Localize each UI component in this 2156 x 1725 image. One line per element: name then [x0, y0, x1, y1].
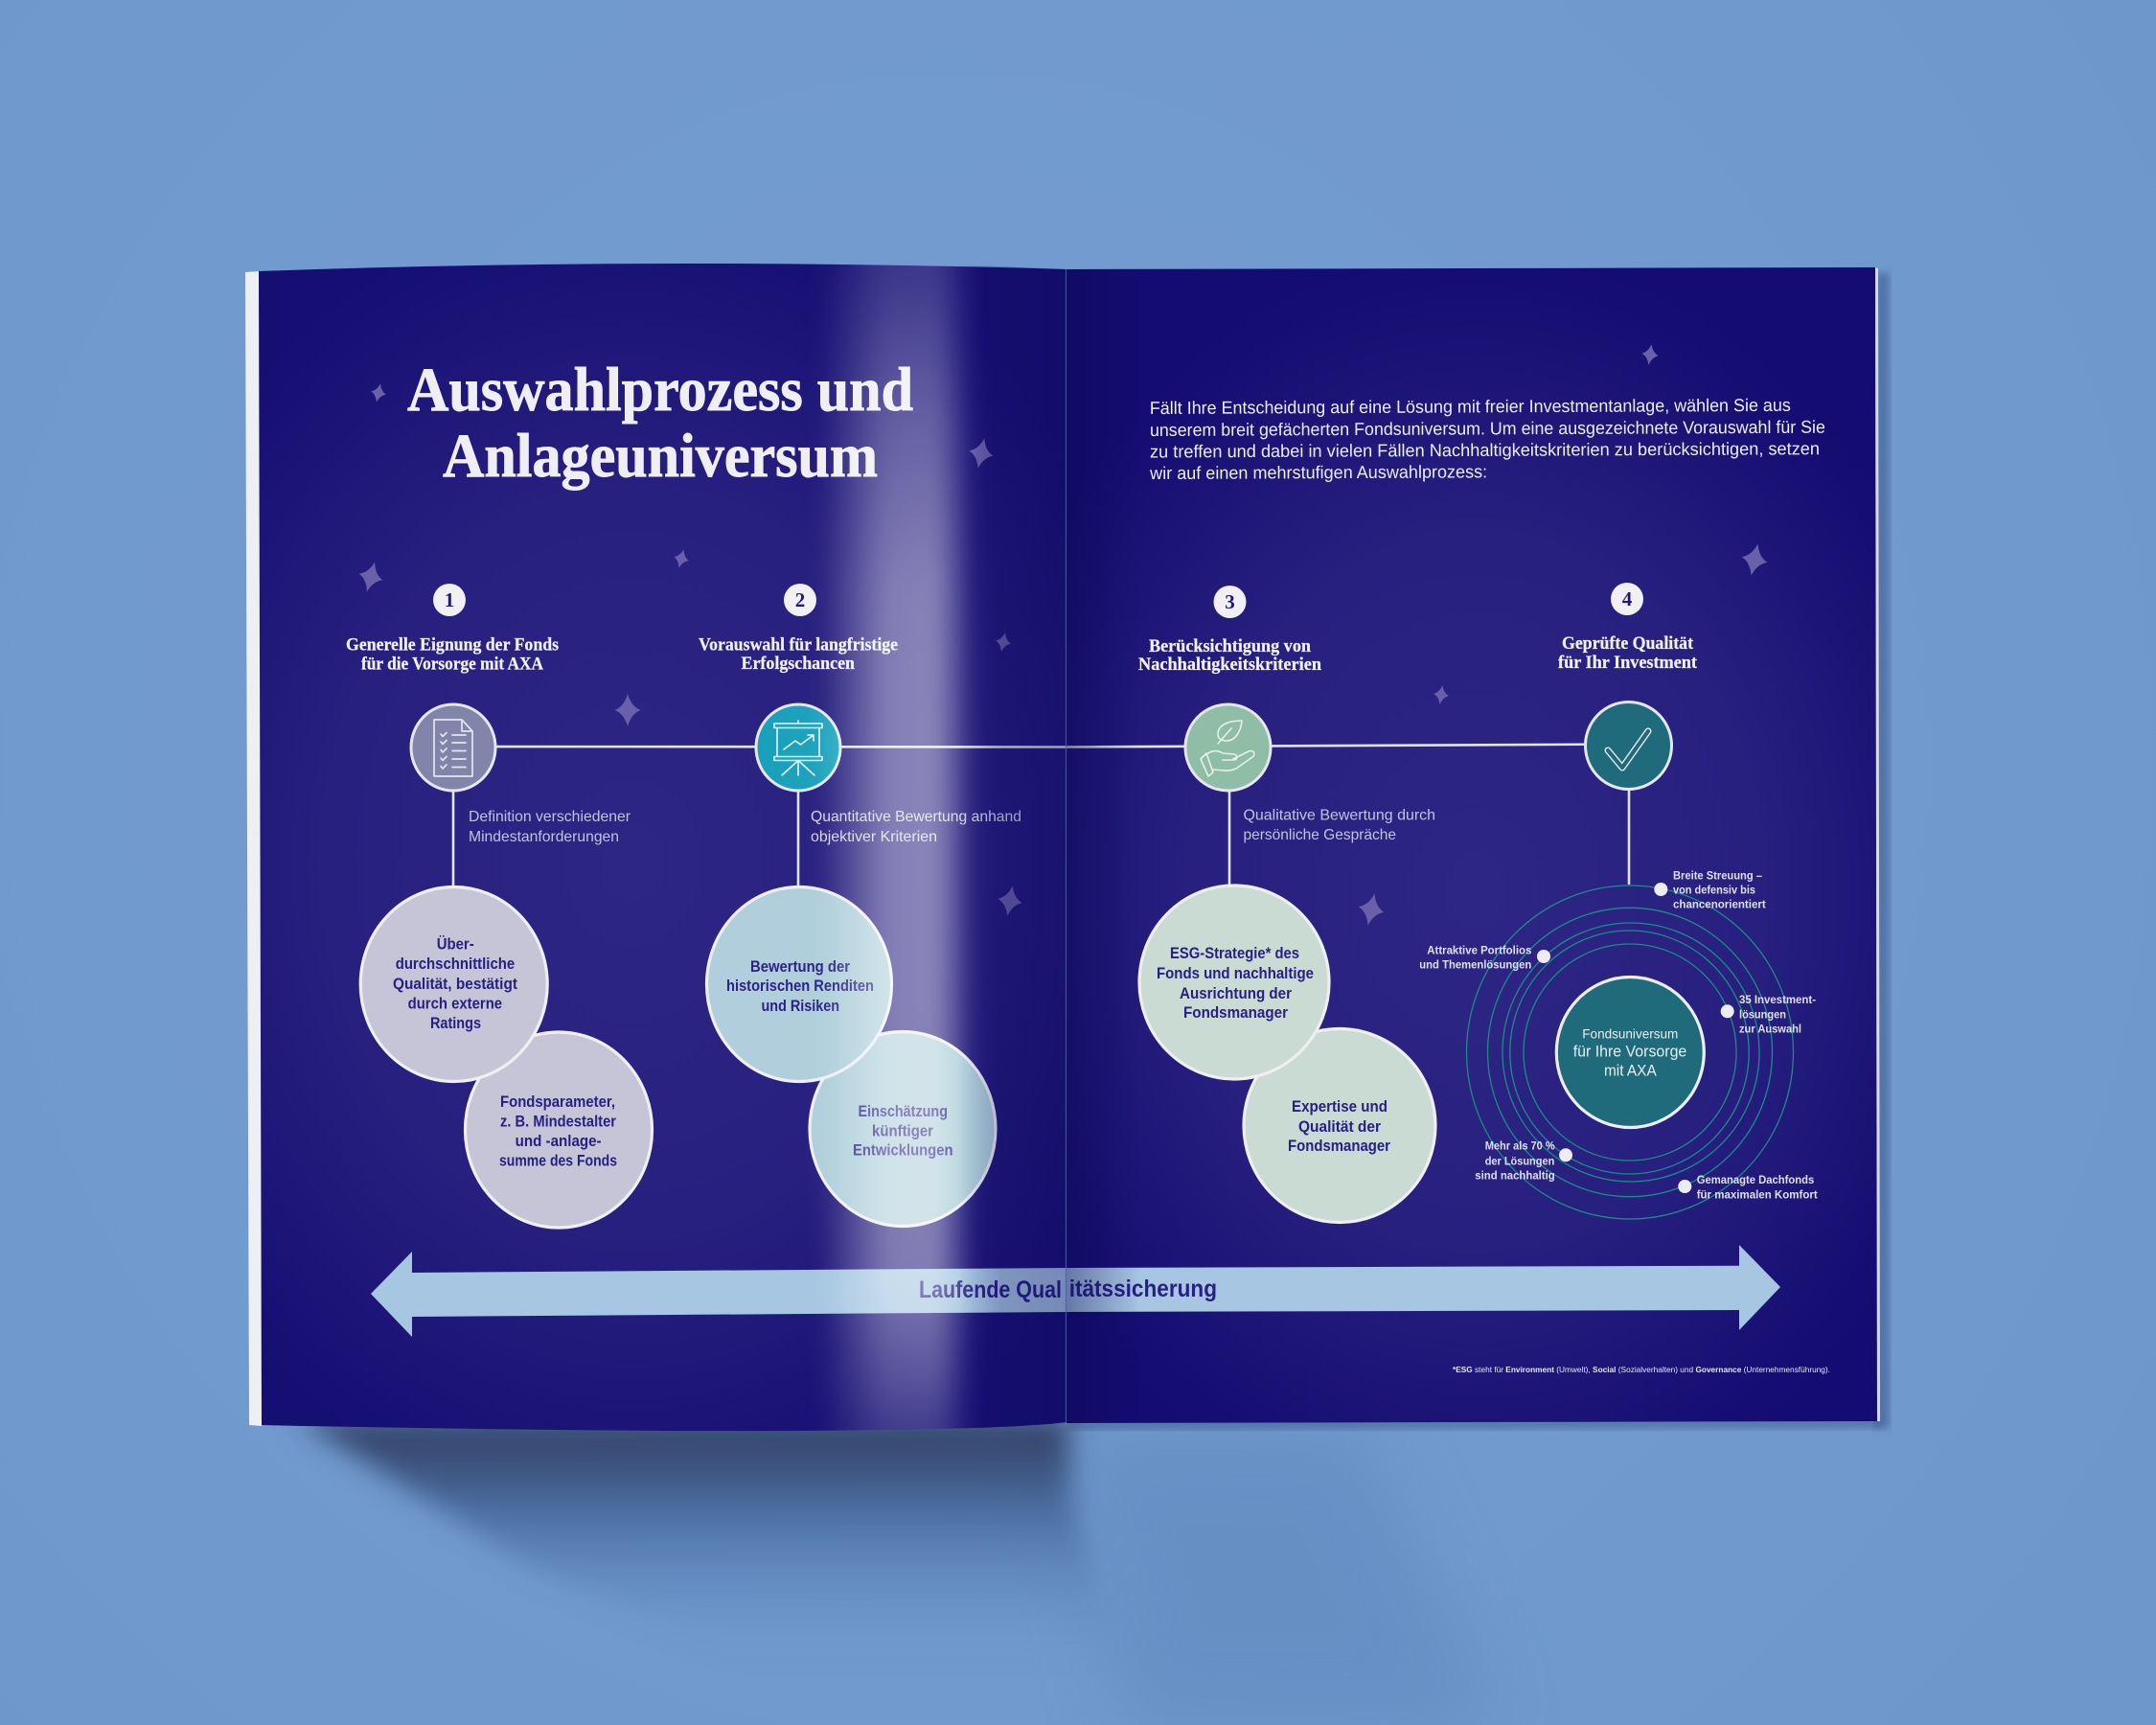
bubble: Überdurchschnittliche Qualität: durch externe: [408, 996, 502, 1013]
panel: left page: [245, 264, 1067, 1431]
step 4 heading: [1558, 634, 1698, 673]
spine shading: [958, 264, 1140, 1430]
bubble: Fondsparameter: [466, 1032, 652, 1228]
orbit labels: und Themenlösungen: [1419, 957, 1531, 971]
orbit labels: [1419, 869, 1818, 1201]
step 3 description: persönliche Gespräche: [1244, 827, 1396, 843]
step 3 description: [1244, 807, 1435, 843]
orbit labels: der Lösungen: [1485, 1154, 1554, 1167]
right page white edge: [1875, 267, 1880, 1421]
step 3 heading: Berücksichtigung von: [1149, 637, 1312, 656]
bubble: ESG-Strategie: Fonds und nachhaltige: [1157, 965, 1314, 982]
star: [996, 884, 1024, 918]
orbit labels: sind nachhaltig: [1475, 1168, 1555, 1182]
step 4: [1558, 583, 1698, 790]
orbit labels: chancenorientiert: [1673, 898, 1766, 911]
bubble: ESG-Strategie: Ausrichtung der: [1180, 985, 1293, 1002]
number badge 3: 3: [1225, 590, 1235, 613]
arrow: Laufende Qualitätssicherung: [371, 1245, 1780, 1337]
bubble: Fondsparameter: z. B. Mindestalter: [500, 1114, 617, 1131]
bubble: Überdurchschnittliche Qualität: Über-: [437, 935, 474, 954]
step 3: [1138, 586, 1435, 1223]
step 2 description: Quantitative Bewertung anhand: [811, 809, 1021, 825]
bubble: Einschätzung: [810, 1031, 996, 1227]
step 1 description: [469, 809, 631, 845]
icon: presentation chart: [756, 704, 840, 791]
decorative stars: [355, 343, 1771, 928]
step 1 heading: für die Vorsorge mit AXA: [361, 656, 544, 675]
arrow: Laufende Qualitätssicherung: itätssicherung: [1069, 1276, 1217, 1302]
arrow: Laufende Qualitätssicherung: Laufende Qual: [919, 1276, 1062, 1303]
step 1 heading: Generelle Eignung der Fonds: [346, 636, 559, 656]
step 1 description: Definition verschiedener: [469, 809, 631, 825]
star: [614, 694, 641, 726]
orbit labels: Attraktive Portfolios: [1427, 943, 1532, 956]
orbit labels: lösungen: [1739, 1007, 1786, 1021]
bubble: Expertise: Qualität der: [1298, 1118, 1382, 1136]
icon: checklist document: [411, 704, 495, 791]
step 3 heading: Nachhaltigkeitskriterien: [1138, 656, 1322, 675]
bubble: ESG-Strategie: [1139, 886, 1329, 1079]
step 2 heading: Vorauswahl für langfristige: [699, 636, 898, 656]
bubble: Einschätzung: künftiger: [872, 1123, 934, 1140]
star: [672, 547, 691, 570]
intro paragraph: Fällt Ihre Entscheidung auf eine Lösung mit freier Investmentanlage, wählen Sie aus: [1150, 395, 1791, 418]
number badge 4: 4: [1622, 587, 1633, 610]
number badge 2: [784, 584, 816, 616]
step 3 description: Qualitative Bewertung durch: [1244, 807, 1435, 824]
core circle: Fondsuniversum: [1582, 1027, 1678, 1042]
star: [1640, 343, 1660, 366]
intro paragraph: zu treffen und dabei in vielen Fällen Nachhaltigkeitskriterien zu berücksichtigen, setzen: [1150, 438, 1820, 461]
bubble: Überdurchschnittliche Qualität: Ratings: [430, 1015, 481, 1032]
core circle: [1556, 978, 1704, 1127]
core circle: für Ihre Vorsorge: [1573, 1044, 1686, 1061]
shadows under brochure: [297, 273, 1890, 1725]
star: [355, 559, 387, 595]
orbit labels: von defensiv bis: [1673, 883, 1755, 896]
right page surface: [1067, 267, 1877, 1423]
step 2 description: [811, 809, 1021, 845]
title: [407, 356, 913, 491]
bubble: Bewertung der Renditen: [707, 887, 891, 1081]
star: [1738, 541, 1771, 578]
bubble: Fondsparameter: summe des Fonds: [499, 1153, 617, 1170]
bubble: ESG-Strategie: ESG-Strategie* des: [1170, 945, 1299, 962]
bubble: Fondsparameter: Fondsparameter,: [500, 1093, 615, 1111]
bubble: Bewertung der Renditen: Bewertung der: [750, 958, 851, 976]
orbit diagram: Fondsuniversum: [1419, 869, 1818, 1219]
bubble: Überdurchschnittliche Qualität: Qualität, bestätigt: [393, 976, 517, 993]
bubble: Überdurchschnittliche Qualität: durchschnittliche: [396, 955, 515, 973]
step 4 heading: für Ihr Investment: [1558, 654, 1698, 673]
bubble: Fondsparameter: und -anlage-: [516, 1133, 602, 1150]
step 2 heading: Erfolgschancen: [742, 655, 856, 674]
orbit labels: zur Auswahl: [1739, 1023, 1801, 1036]
step 2: [699, 584, 1021, 1227]
footnote: *ESG steht für Environment (Umwelt), Social (Sozialverhalten) und Governance (Unternehmensführung).: [1453, 1365, 1830, 1374]
orbit labels: Gemanagte Dachfonds: [1697, 1173, 1815, 1186]
connector lines: [453, 744, 1629, 886]
bubble: Expertise: Fondsmanager: [1288, 1138, 1391, 1155]
light reflection band over left page: [819, 230, 977, 1466]
title: Anlageuniversum: [443, 422, 878, 491]
core circle: mit AXA: [1604, 1063, 1657, 1080]
step 2 description: objektiver Kriterien: [811, 829, 937, 845]
bubble: Expertise: Expertise und: [1292, 1098, 1388, 1116]
orbit dots: [1537, 883, 1734, 1193]
panel: right page: [1067, 267, 1880, 1423]
orbit labels: Breite Streuung –: [1673, 869, 1762, 883]
orbit rings: [1466, 886, 1794, 1219]
bubble: ESG-Strategie: Fondsmanager: [1183, 1004, 1289, 1022]
star: [369, 382, 388, 403]
bubble: Einschätzung: Einschätzung: [859, 1103, 948, 1120]
number badge 2: 2: [795, 588, 805, 611]
bubble: Bewertung der Renditen: und Risiken: [761, 998, 839, 1015]
step 1 heading: [346, 636, 559, 675]
bubble: Einschätzung: Entwicklungen: [853, 1142, 952, 1160]
intro paragraph: [1149, 395, 1825, 483]
star: [1433, 684, 1450, 705]
orbit labels: Mehr als 70 %: [1485, 1138, 1555, 1152]
icon: leaf in hand: [1185, 704, 1271, 791]
bubble: Überdurchschnittliche Qualität: [360, 887, 547, 1081]
number badge 3: [1213, 586, 1246, 618]
step 3 heading: [1138, 637, 1322, 675]
orbit labels: 35 Investment-: [1739, 993, 1816, 1006]
step 2 heading: [699, 636, 898, 674]
intro paragraph: unserem breit gefächerten Fondsuniversum. Um eine ausgezeichnete Vorauswahl für Sie: [1150, 417, 1825, 440]
step 1 description: Mindestanforderungen: [469, 829, 619, 845]
star: [994, 632, 1013, 653]
step 4 heading: Geprüfte Qualität: [1562, 634, 1694, 654]
number badge 1: 1: [445, 588, 454, 611]
icon: check mark: [1585, 702, 1671, 790]
step 1: [346, 584, 652, 1228]
star: [1355, 891, 1388, 928]
bubble: Expertise: [1244, 1029, 1435, 1223]
star: [966, 436, 997, 471]
number badge 1: [433, 584, 466, 616]
orbit labels: für maximalen Komfort: [1697, 1187, 1818, 1201]
number badge 4: [1611, 583, 1643, 615]
white page edge: [245, 271, 262, 1426]
bubble: Bewertung der Renditen: historischen Renditen: [726, 978, 874, 995]
left page surface: [259, 264, 1067, 1431]
intro paragraph: wir auf einen mehrstufigen Auswahlprozess:: [1149, 461, 1487, 483]
title: Auswahlprozess und: [407, 356, 913, 425]
